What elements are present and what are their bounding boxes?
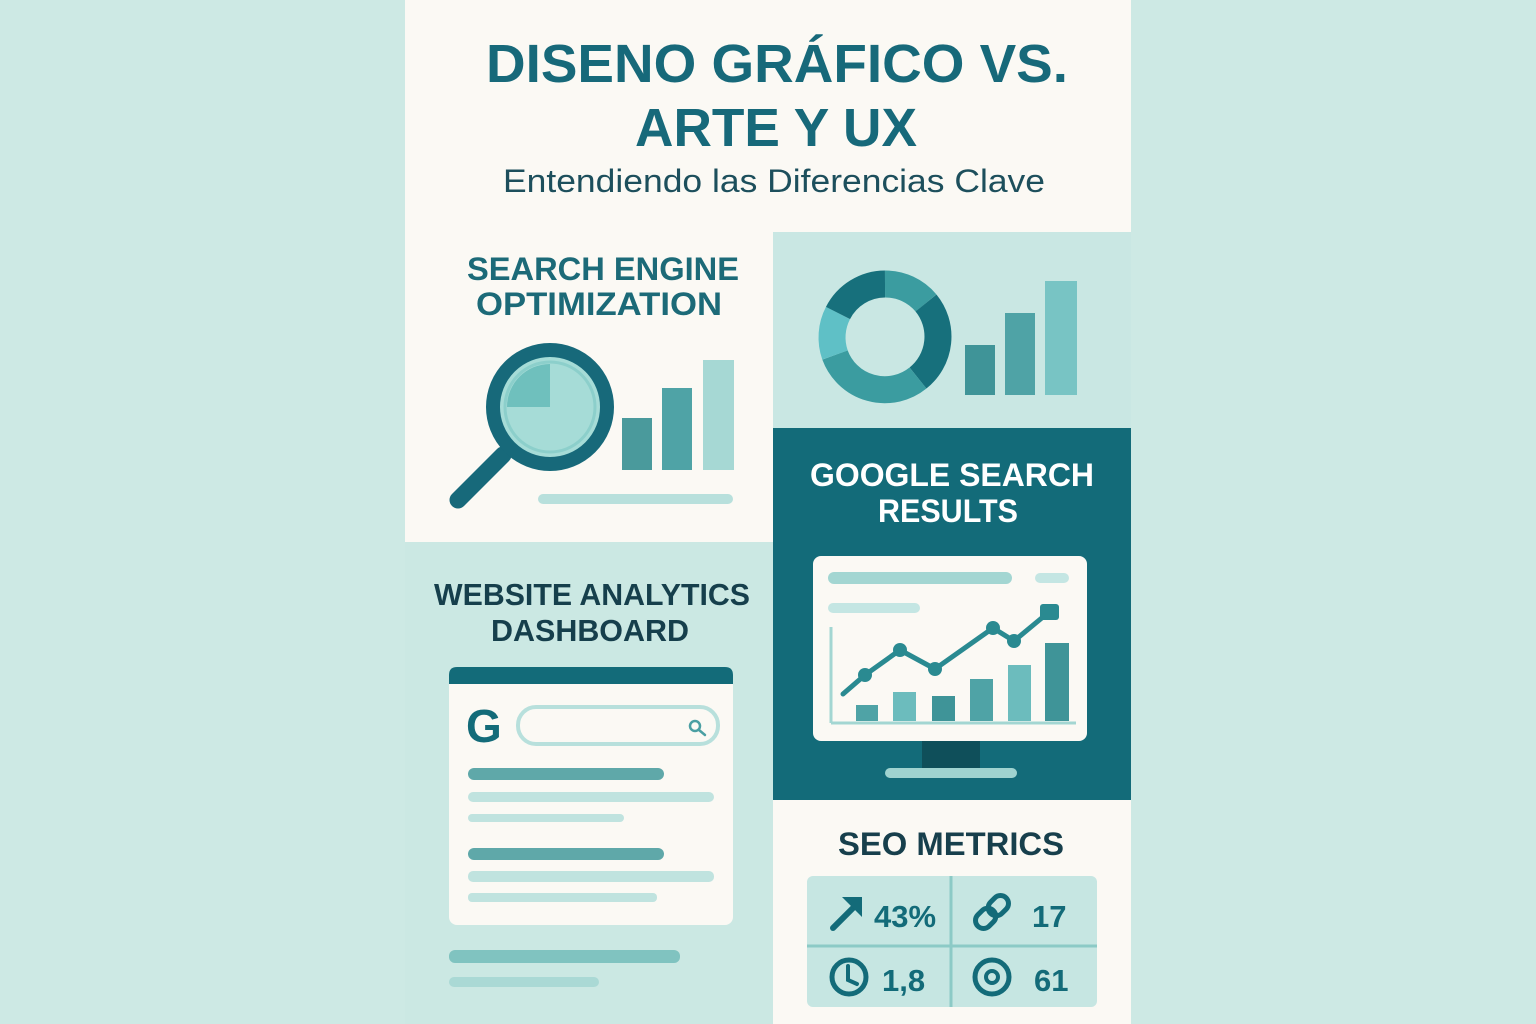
title — [486, 34, 1068, 158]
heading: google search results — [810, 457, 1094, 529]
bar chart: seo — [538, 360, 734, 504]
heading: google search results: RESULTS — [878, 493, 1018, 529]
subtitle: Entendiendo las Diferencias Clave — [503, 163, 1045, 199]
heading: google search results: GOOGLE SEARCH — [810, 457, 1094, 493]
donut chart — [832, 284, 938, 390]
heading: website analytics — [434, 577, 750, 648]
metric: link 17: 17 — [1032, 899, 1066, 934]
metric: arrow 43%: 43% — [874, 899, 936, 934]
metric: clock 1,8: 1,8 — [882, 963, 925, 998]
bar chart: top right — [965, 281, 1077, 395]
browser card: G — [466, 700, 502, 752]
heading: SEO — [467, 251, 739, 322]
title: ARTE Y UX — [635, 98, 917, 158]
metric: clock 1,8 — [832, 960, 925, 998]
metric: arrow 43% — [833, 897, 936, 934]
panel: search engine optimization — [405, 232, 773, 542]
metric: link 17 — [972, 892, 1066, 934]
heading: website analytics: WEBSITE ANALYTICS — [434, 577, 750, 612]
panel: google search results — [773, 428, 1131, 800]
header panel — [405, 0, 1131, 232]
heading: SEO: SEARCH ENGINE — [467, 251, 739, 287]
panel: seo metrics — [773, 800, 1131, 1024]
icon: magnifier — [458, 350, 607, 500]
metric: target 61 — [975, 960, 1068, 998]
metric: target 61: 61 — [1034, 963, 1068, 998]
heading: seo metrics: SEO METRICS — [838, 826, 1064, 862]
panel: charts top right — [773, 232, 1131, 428]
title: DISENO GRÁFICO VS. — [486, 34, 1068, 94]
icon: monitor with chart — [813, 556, 1087, 778]
browser card — [449, 667, 733, 925]
heading: website analytics: DASHBOARD — [491, 613, 689, 648]
metrics grid — [807, 876, 1097, 1007]
panel: website analytics dashboard — [405, 542, 773, 1024]
heading: SEO: OPTIMIZATION — [476, 286, 722, 322]
text lines below card — [449, 950, 680, 987]
